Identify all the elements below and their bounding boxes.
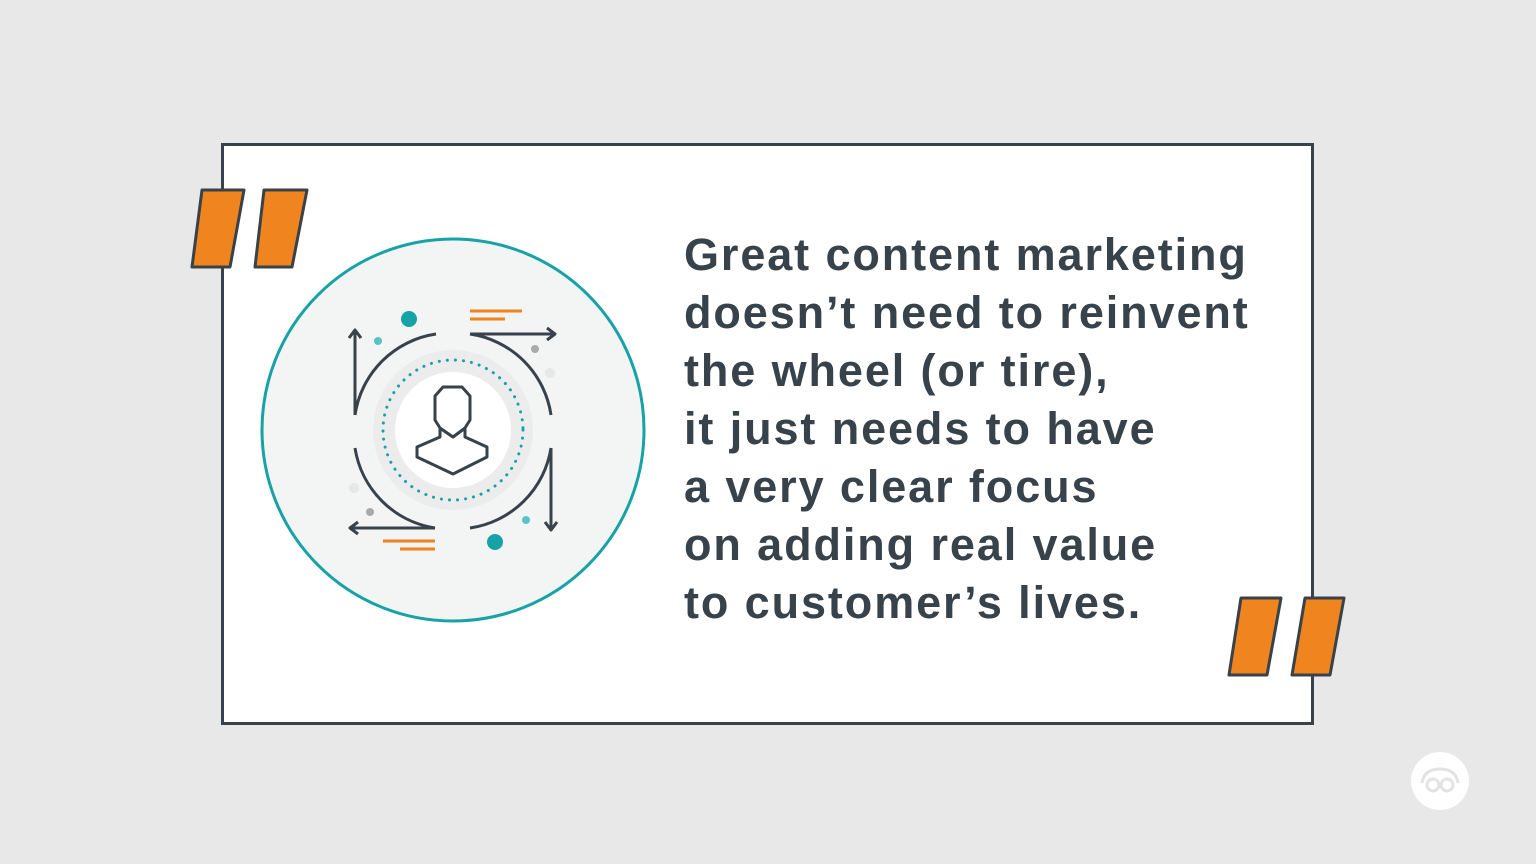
- text block: quote: on adding real value: [684, 519, 1157, 570]
- text block: quote: doesn’t need to reinvent: [684, 287, 1250, 338]
- text block: quote: it just needs to have: [684, 403, 1156, 454]
- text block: quote: a very clear focus: [684, 461, 1098, 512]
- icon: closing quote marks: [1228, 596, 1346, 676]
- icon: opening quote marks: [190, 188, 308, 268]
- text block: quote: to customer’s lives.: [684, 577, 1142, 628]
- panel: quote card: [221, 143, 1314, 725]
- text block: quote: the wheel (or tire),: [684, 345, 1110, 396]
- text block: quote: Great content marketing: [684, 229, 1248, 280]
- icon: logo: [1411, 752, 1469, 810]
- text block: quote: [684, 229, 1250, 628]
